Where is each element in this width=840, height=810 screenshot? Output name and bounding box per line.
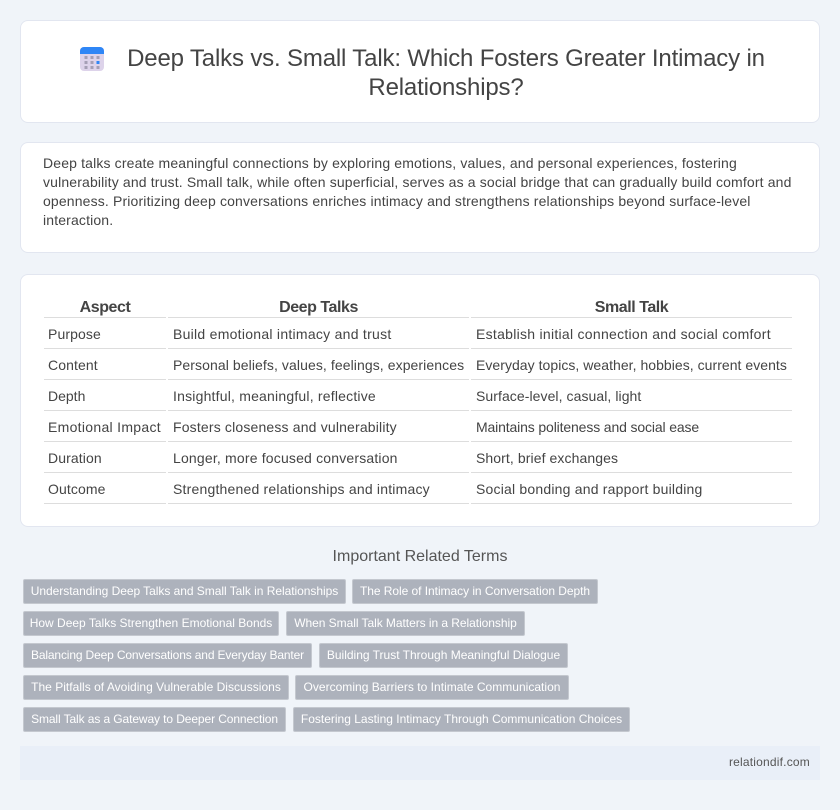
intro text: Deep talks create meaningful connections by exploring emotions, values, and personal experiences, fostering xyxy=(43,155,737,171)
intro text: openness. Prioritizing deep conversations enriches intimacy and strengthens relationships beyond surface-level xyxy=(43,193,751,209)
row: depth: Surface-level, casual, light xyxy=(476,388,641,404)
tag: Balancing Deep Conversations and Everyday Banter xyxy=(31,648,304,662)
title xyxy=(127,45,765,101)
tag xyxy=(23,643,312,668)
row: outcome: Social bonding and rapport building xyxy=(476,481,702,497)
table header xyxy=(44,299,792,318)
intro text: vulnerability and trust. Small talk, while often superficial, serves as a social bridge that can gradually build comfort and xyxy=(43,174,792,190)
row: emotional impact xyxy=(44,419,792,442)
row: duration: Longer, more focused conversation xyxy=(173,450,398,466)
row: emotional impact: Maintains politeness and social ease xyxy=(476,419,699,435)
row: depth xyxy=(44,388,792,411)
tag xyxy=(286,611,525,636)
tag xyxy=(23,707,286,732)
tag: Building Trust Through Meaningful Dialogue xyxy=(327,648,560,662)
icon: calendar xyxy=(80,47,104,71)
tag: The Role of Intimacy in Conversation Depth xyxy=(360,584,590,598)
row: depth: Insightful, meaningful, reflective xyxy=(173,388,376,404)
row: content: Personal beliefs, values, feelings, experiences xyxy=(173,357,464,373)
intro text: interaction. xyxy=(43,212,113,228)
row: content: Content xyxy=(48,357,98,373)
header card xyxy=(20,20,820,123)
row: outcome: Outcome xyxy=(48,481,106,497)
tag: Understanding Deep Talks and Small Talk in Relationships xyxy=(31,584,338,598)
row: depth: Depth xyxy=(48,388,85,404)
row: duration: Duration xyxy=(48,450,102,466)
tag xyxy=(295,675,569,700)
row: purpose xyxy=(44,326,792,349)
tag xyxy=(293,707,630,732)
heading: related terms: Important Related Terms xyxy=(333,548,507,565)
footer bar xyxy=(20,746,820,780)
row: duration xyxy=(44,450,792,473)
tag xyxy=(352,579,598,604)
table header: Aspect xyxy=(80,299,130,316)
tag: Fostering Lasting Intimacy Through Communication Choices xyxy=(301,712,622,726)
tag xyxy=(23,579,346,604)
tag xyxy=(23,611,279,636)
title: Deep Talks vs. Small Talk: Which Fosters Greater Intimacy in xyxy=(127,45,765,72)
table header: Deep Talks xyxy=(279,299,358,316)
row: duration: Short, brief exchanges xyxy=(476,450,618,466)
tag xyxy=(23,675,289,700)
tags: related terms xyxy=(23,579,630,732)
tag: The Pitfalls of Avoiding Vulnerable Discussions xyxy=(31,680,281,694)
panel: comparison table xyxy=(20,274,820,527)
row: emotional impact: Fosters closeness and vulnerability xyxy=(173,419,397,435)
row: emotional impact: Emotional Impact xyxy=(48,419,161,435)
title: Relationships? xyxy=(368,74,524,101)
tag: Small Talk as a Gateway to Deeper Connection xyxy=(31,712,278,726)
row: content xyxy=(44,357,792,380)
row: content: Everyday topics, weather, hobbies, current events xyxy=(476,357,787,373)
row: purpose: Build emotional intimacy and trust xyxy=(173,326,392,342)
table header: Small Talk xyxy=(595,299,668,316)
tag: How Deep Talks Strengthen Emotional Bonds xyxy=(30,616,272,630)
row: outcome xyxy=(44,481,792,504)
intro panel xyxy=(20,142,820,253)
tag xyxy=(319,643,568,668)
footer text: relationdif.com xyxy=(729,755,810,769)
row: outcome: Strengthened relationships and intimacy xyxy=(173,481,430,497)
tag: When Small Talk Matters in a Relationship xyxy=(294,616,517,630)
row: purpose: Establish initial connection and social comfort xyxy=(476,326,771,342)
row: purpose: Purpose xyxy=(48,326,101,342)
intro text xyxy=(43,155,792,228)
tag: Overcoming Barriers to Intimate Communication xyxy=(304,680,560,694)
